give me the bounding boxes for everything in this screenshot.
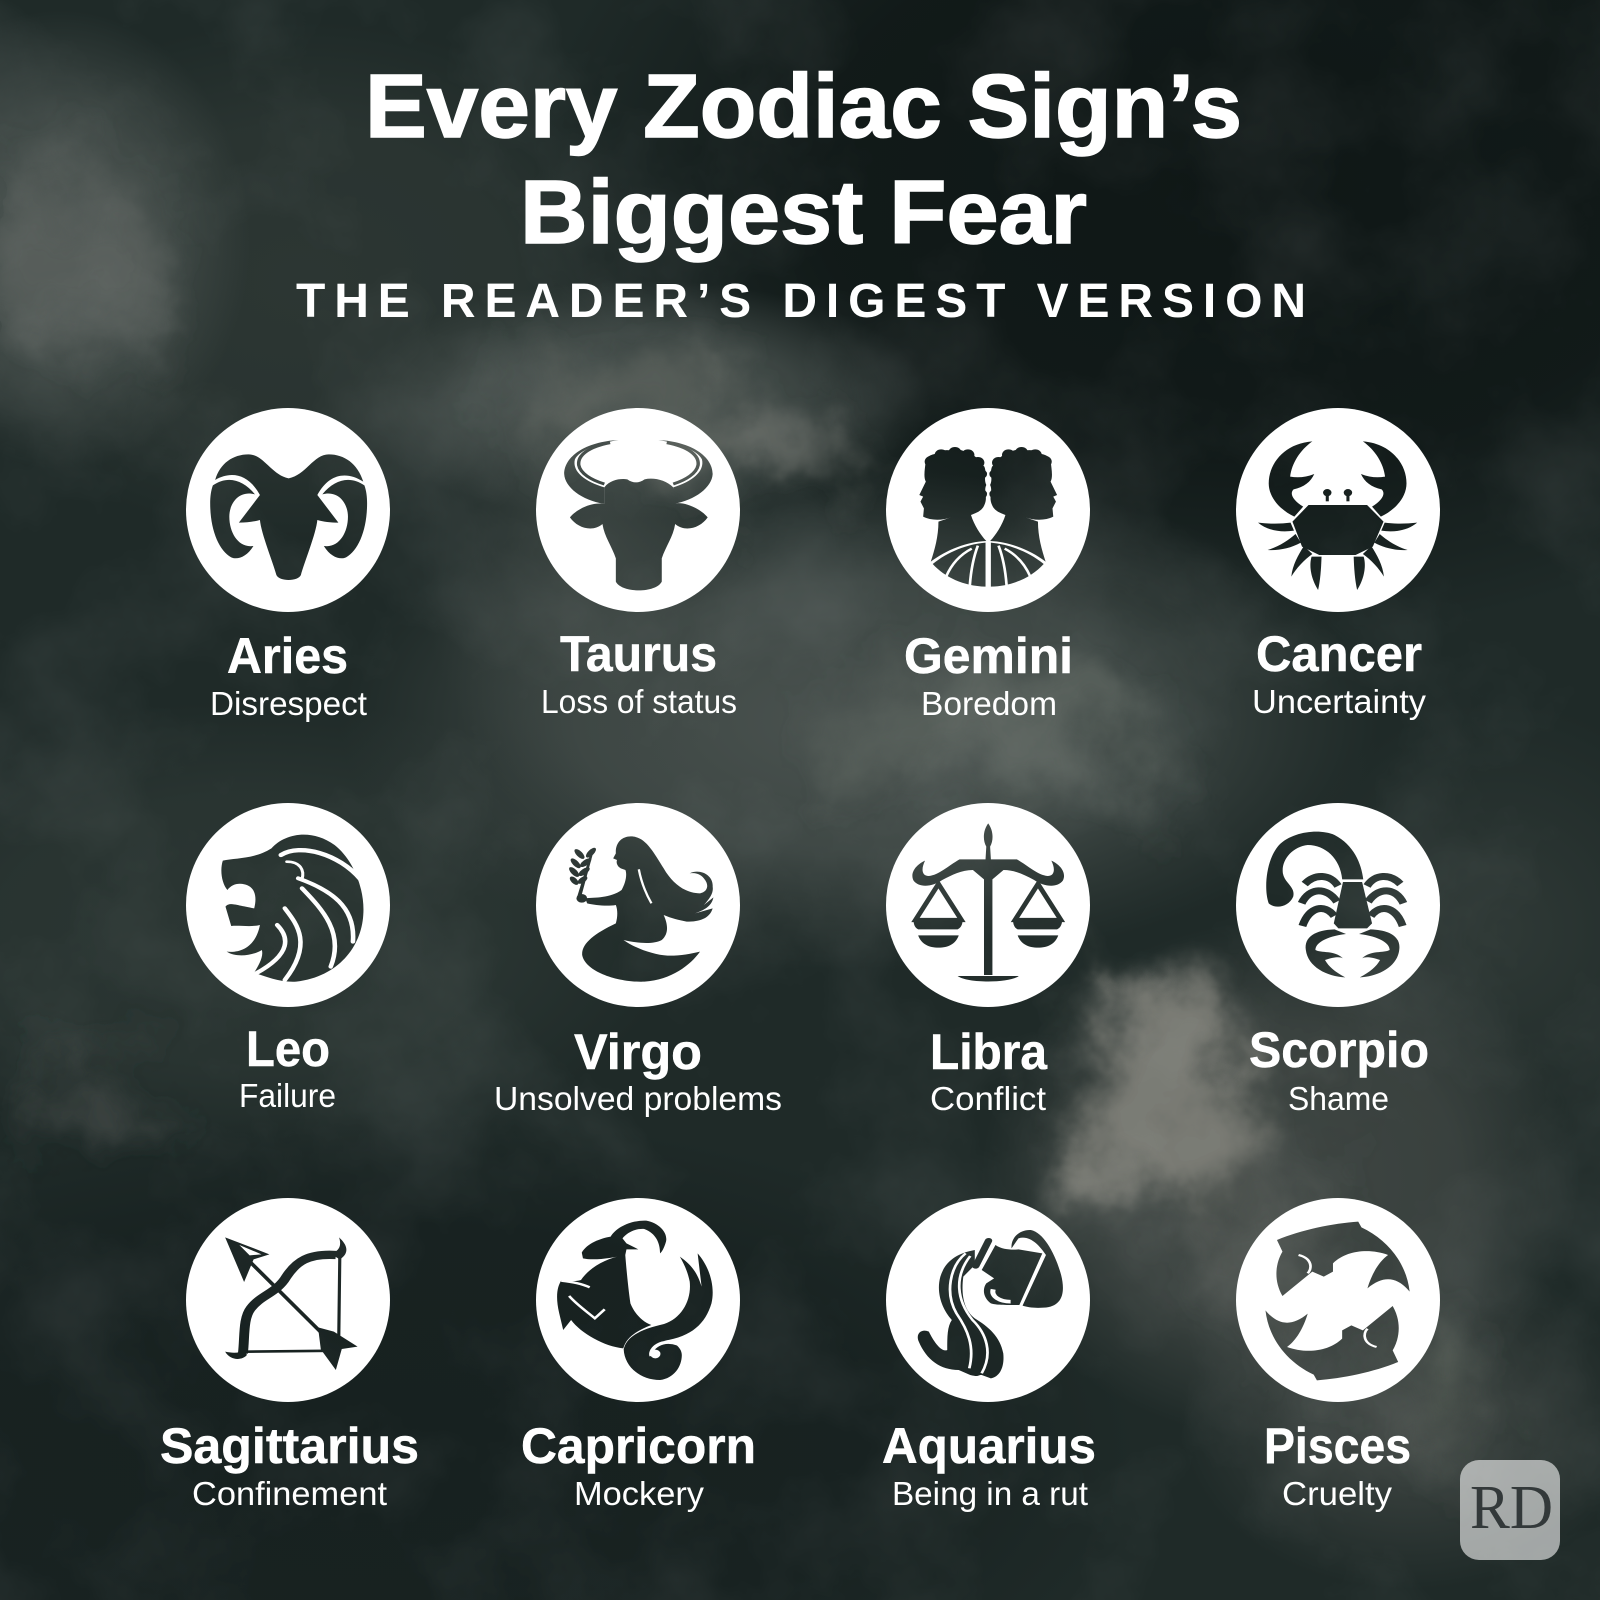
- name: Libra: Libra: [930, 1024, 1048, 1080]
- subtitle: THE READER’S DIGEST VERSION: [296, 275, 1306, 328]
- fear: Confinement: Confinement: [192, 1475, 387, 1512]
- name: Pisces: Pisces: [1264, 1418, 1411, 1474]
- sign: Libra: [886, 803, 1090, 1117]
- sign: Sagittarius: [160, 1198, 419, 1512]
- name: Cancer: Cancer: [1256, 626, 1422, 682]
- icon: Aquarius water bearer: [886, 1198, 1090, 1402]
- icon: Capricorn sea-goat: [536, 1198, 740, 1402]
- fear: Being in a rut: Being in a rut: [892, 1475, 1088, 1512]
- fear: Shame: Shame: [1288, 1080, 1389, 1117]
- icon: Taurus bull: [536, 408, 740, 612]
- icon: Gemini twins: [886, 408, 1090, 612]
- name: Taurus: Taurus: [560, 626, 717, 682]
- icon: Pisces fish: [1236, 1198, 1440, 1402]
- title: Biggest Fear: [520, 163, 1087, 263]
- name: Gemini: Gemini: [904, 628, 1073, 684]
- icon: Cancer crab: [1236, 408, 1440, 612]
- fear: Unsolved problems: Unsolved problems: [494, 1080, 782, 1117]
- logo: RD badge: [1460, 1460, 1560, 1560]
- sign: Capricorn: [521, 1198, 756, 1512]
- fear: Conflict: Conflict: [930, 1080, 1046, 1117]
- icon: Sagittarius bow and arrow: [186, 1198, 390, 1402]
- icon: Aries ram: [186, 408, 390, 612]
- sign: Leo: [186, 803, 390, 1114]
- fear: Failure: Failure: [239, 1077, 336, 1114]
- fear: Loss of status: Loss of status: [541, 683, 737, 720]
- sign: Aries: [186, 408, 390, 722]
- fear: Uncertainty: Uncertainty: [1252, 683, 1427, 720]
- name: Virgo: Virgo: [574, 1024, 702, 1080]
- icon: Libra scales: [886, 803, 1090, 1007]
- name: Sagittarius: Sagittarius: [160, 1418, 419, 1474]
- name: Aquarius: Aquarius: [882, 1418, 1096, 1474]
- name: Leo: Leo: [246, 1021, 330, 1077]
- sign: Cancer: [1236, 408, 1440, 720]
- sign: Virgo: [494, 803, 782, 1117]
- name: Scorpio: Scorpio: [1249, 1022, 1429, 1078]
- fear: Mockery: Mockery: [574, 1475, 705, 1512]
- fear: Boredom: Boredom: [921, 685, 1057, 722]
- icon: Leo lion: [186, 803, 390, 1007]
- sign: Scorpio: [1236, 803, 1440, 1117]
- title: [365, 57, 1242, 263]
- icon: Scorpio scorpion: [1236, 803, 1440, 1007]
- logo: RD badge: RD: [1470, 1474, 1553, 1542]
- sign: Aquarius: [882, 1198, 1096, 1512]
- name: Aries: Aries: [227, 628, 348, 684]
- sign: Gemini: [886, 408, 1090, 722]
- title: Every Zodiac Sign’s: [365, 57, 1242, 157]
- icon: Virgo maiden: [536, 803, 740, 1007]
- fear: Disrespect: Disrespect: [210, 685, 367, 722]
- fear: Cruelty: Cruelty: [1282, 1475, 1393, 1512]
- sign: Pisces: [1236, 1198, 1440, 1512]
- name: Capricorn: Capricorn: [521, 1418, 756, 1474]
- sign: Taurus: [536, 408, 740, 720]
